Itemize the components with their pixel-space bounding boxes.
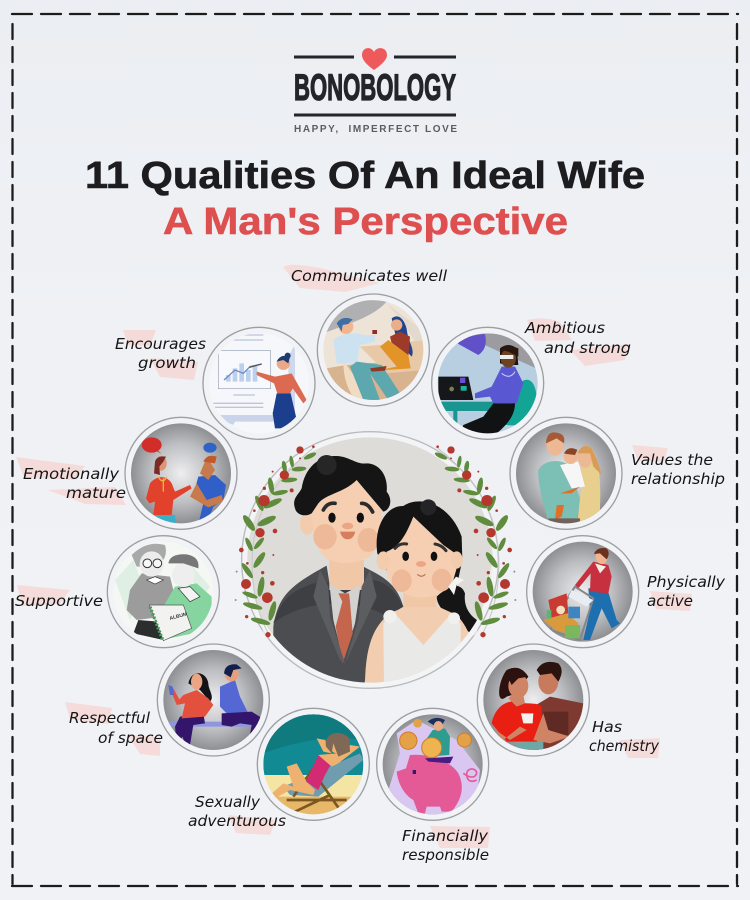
label: financially responsible: responsible (402, 846, 489, 864)
illustration: emotionally mature (125, 417, 237, 529)
label: values the relationship: Values the (631, 451, 713, 469)
illustration: financially responsible (377, 708, 489, 820)
label: physically active: active (647, 592, 693, 610)
logo tagline: HAPPY, IMPERFECT LOVE (294, 124, 457, 135)
label: emotionally mature: Emotionally (23, 465, 120, 483)
brush strokes behind labels (16, 265, 692, 848)
floral wreath (235, 445, 516, 637)
label: financially responsible (402, 827, 489, 864)
illustration: has chemistry (477, 644, 589, 756)
label: ambitious and strong (524, 319, 631, 357)
illustrations, top row (203, 294, 544, 439)
label: sexually adventurous: Sexually (195, 793, 261, 811)
label: ambitious and strong: Ambitious (524, 319, 605, 337)
label: emotionally mature: mature (66, 484, 126, 502)
illustration: sexually adventurous (257, 708, 369, 820)
illustration: supportive (107, 536, 219, 648)
label: physically active: Physically (647, 573, 726, 591)
title: 11 Qualities Of An Ideal Wife (85, 155, 645, 197)
icon: heart (362, 48, 387, 70)
central couple illustration (235, 432, 516, 688)
label: communicates well: Communicates well (291, 267, 448, 285)
illustration: communicates well (317, 294, 429, 407)
illustrations, left column (107, 417, 269, 756)
label: physically active (647, 573, 726, 610)
label: has chemistry: chemistry (589, 737, 660, 755)
label: has chemistry (589, 718, 660, 755)
label: values the relationship (631, 451, 725, 488)
illustration: supportive: ALBUM (169, 611, 188, 622)
label: has chemistry: Has (592, 718, 622, 736)
label: values the relationship: relationship (631, 470, 725, 488)
man (273, 455, 403, 687)
label: encourages growth: Encourages (115, 335, 206, 353)
illustration: encourages growth (203, 327, 315, 439)
illustration: ambitious and strong (432, 327, 544, 439)
label: respectful of space (69, 709, 163, 747)
woman (365, 499, 480, 687)
label: emotionally mature (23, 465, 126, 502)
label: encourages growth (115, 335, 206, 372)
label: encourages growth: growth (138, 354, 196, 372)
label: supportive: Supportive (15, 592, 103, 610)
illustrations, right column (510, 417, 639, 648)
title (85, 155, 645, 243)
label: sexually adventurous: adventurous (188, 812, 286, 830)
illustration: values the relationship (510, 417, 622, 529)
logo wordmark: BONOBOLOGY (294, 67, 456, 108)
label: respectful of space: of space (98, 729, 163, 747)
logo (294, 48, 457, 135)
illustrations, bottom row (257, 644, 589, 820)
illustration: physically active (527, 536, 639, 648)
label: respectful of space: Respectful (69, 709, 151, 727)
subtitle: A Man's Perspective (163, 201, 568, 243)
label: sexually adventurous (188, 793, 286, 830)
label: financially responsible: Financially (402, 827, 489, 845)
illustration: respectful of space (157, 644, 269, 756)
label: ambitious and strong: and strong (544, 339, 631, 357)
